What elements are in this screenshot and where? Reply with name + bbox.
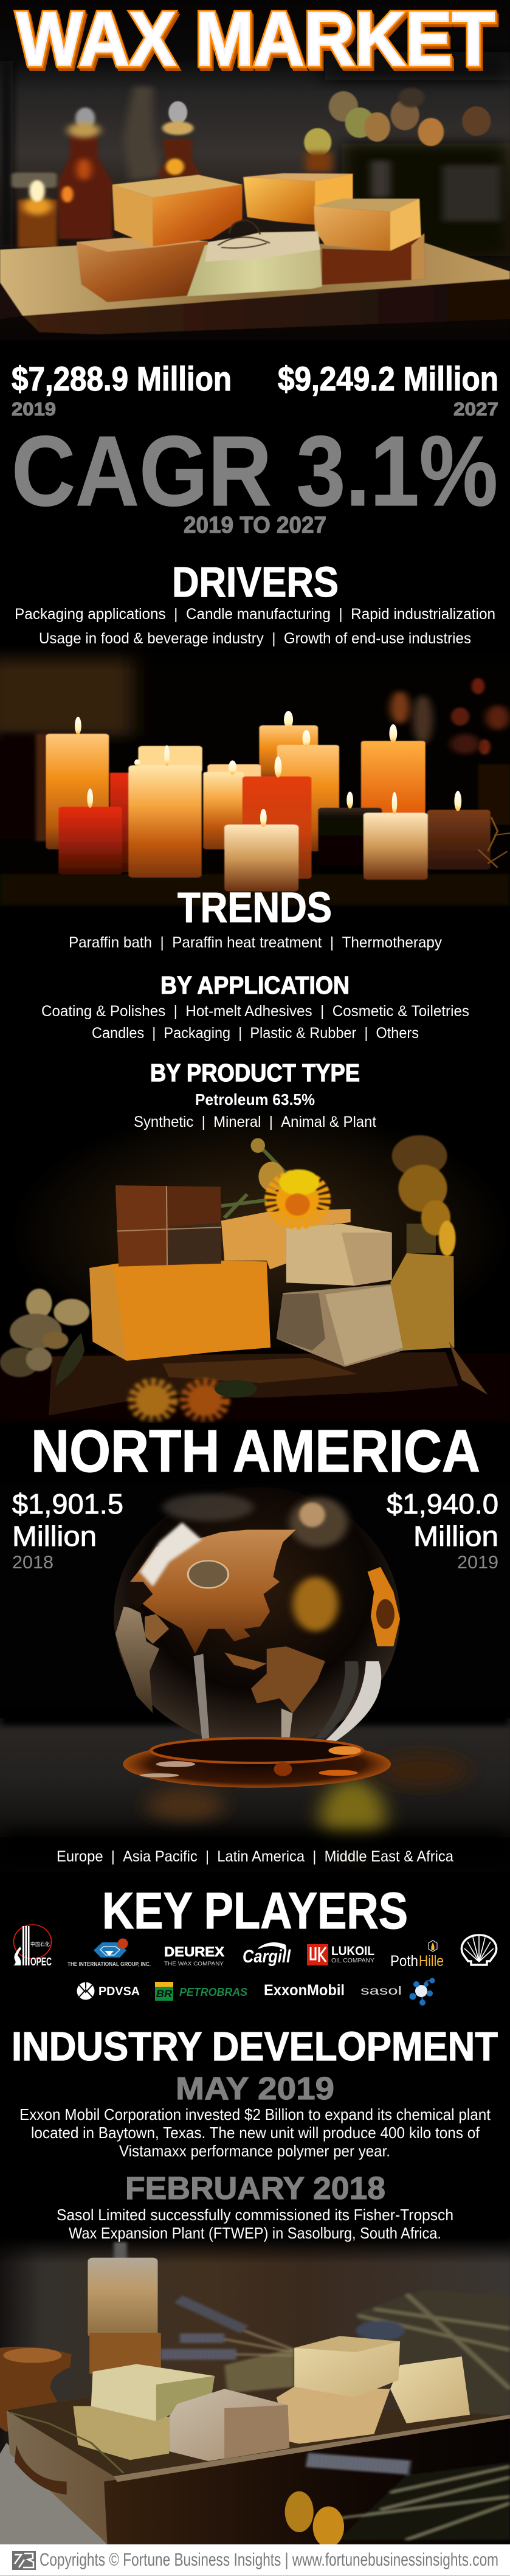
footer bar bbox=[0, 2544, 510, 2576]
trends list: Paraffin bath | Paraffin heat treatment | Thermotherapy bbox=[69, 934, 442, 951]
logo: Poth Hille: Hille bbox=[419, 1953, 444, 1970]
logo: Poth Hille bbox=[390, 1941, 444, 1970]
logo: Lukoil bbox=[307, 1944, 374, 1965]
photo: soap bars in wooden tray with lavender bbox=[0, 2238, 510, 2547]
logo: ExxonMobil: ExxonMobil bbox=[264, 1982, 345, 1999]
heading: by application: BY APPLICATION bbox=[160, 971, 350, 999]
North America value 2019: $1,940.0 bbox=[387, 1488, 498, 1520]
logo: Deurex: DEUREX bbox=[164, 1944, 224, 1959]
paragraph: Exxon Mobil: Exxon Mobil Corporation invested $2 Billion to expand its chemical plant bbox=[19, 2105, 491, 2124]
logo: Sinopec bbox=[13, 1925, 52, 1968]
logo: Petrobras bbox=[155, 1982, 247, 2001]
market value 2019: 2019 bbox=[12, 398, 56, 420]
paragraph: Exxon Mobil bbox=[19, 2105, 491, 2160]
heading: by product type: BY PRODUCT TYPE bbox=[150, 1059, 360, 1087]
logo: Petrobras: BR bbox=[156, 1988, 173, 2000]
heading: trends: TRENDS bbox=[177, 884, 332, 931]
logo: Cargill: Cargill bbox=[243, 1947, 291, 1967]
leading product share: Petroleum 63.5% bbox=[195, 1090, 315, 1109]
paragraph: Exxon Mobil: located in Baytown, Texas. The new unit will produce 400 kilo tons of bbox=[31, 2124, 480, 2142]
market value 2027 bbox=[278, 359, 498, 420]
paragraph: Sasol: Sasol Limited successfully commissioned its Fisher-Tropsch bbox=[57, 2206, 453, 2224]
paragraph: Sasol bbox=[57, 2206, 453, 2242]
logo: PDVSA bbox=[77, 1981, 140, 2000]
logo: Lukoil: LUKOIL bbox=[331, 1944, 374, 1958]
logo: Shell bbox=[461, 1935, 497, 1965]
drivers list: Packaging applications | Candle manufacturing | Rapid industrialization bbox=[15, 606, 495, 623]
other regions list: Europe | Asia Pacific | Latin America | Middle East & Africa bbox=[57, 1848, 453, 1865]
date: May 2019: MAY 2019 bbox=[176, 2071, 334, 2107]
CAGR period: 2019 TO 2027 bbox=[184, 513, 326, 538]
market value 2019: $7,288.9 Million bbox=[12, 359, 232, 398]
application list: Coating & Polishes | Hot-melt Adhesives | Cosmetic & Toiletries bbox=[41, 1003, 469, 1020]
date: February 2018: FEBRUARY 2018 bbox=[125, 2171, 385, 2206]
logo: The International Group bbox=[67, 1939, 151, 1968]
logo: Poth Hille: Poth bbox=[390, 1953, 418, 1970]
North America value 2018: 2018 bbox=[12, 1553, 53, 1573]
paragraph: Exxon Mobil: Vistamaxx performance polymer per year. bbox=[119, 2142, 390, 2160]
photo: wax blocks with flowers on log bbox=[0, 1109, 510, 1439]
logo row: key players bbox=[13, 1925, 497, 2006]
logo: Sinopec: 中国石化 bbox=[30, 1941, 50, 1947]
photo: wax globe on amber base bbox=[0, 1487, 510, 1862]
logo: PDVSA: PDVSA bbox=[98, 1985, 140, 1998]
logo: Sasol: sasol bbox=[360, 1985, 402, 1998]
footer logo bbox=[12, 2551, 36, 2570]
North America value 2018 bbox=[12, 1488, 123, 1573]
logo: Lukoil: OIL COMPANY bbox=[331, 1958, 374, 1964]
North America value 2019: 2019 bbox=[457, 1553, 498, 1573]
photo: burning candles bbox=[0, 651, 510, 906]
drivers list bbox=[15, 606, 495, 647]
heading: drivers: DRIVERS bbox=[172, 558, 339, 606]
logo: The International Group: THE INTERNATIONAL GROUP, INC. bbox=[67, 1961, 151, 1968]
application list: Candles | Packaging | Plastic & Rubber | Others bbox=[92, 1025, 419, 1042]
logo: Deurex: THE WAX COMPANY bbox=[164, 1961, 224, 1967]
market value 2019 bbox=[12, 359, 232, 420]
logo: Petrobras: PETROBRAS bbox=[179, 1986, 247, 1998]
North America value 2018: Million bbox=[12, 1520, 97, 1552]
market value 2027: 2027 bbox=[453, 398, 498, 420]
paragraph: Sasol: Wax Expansion Plant (FTWEP) in Sasolburg, South Africa. bbox=[69, 2224, 441, 2242]
North America value 2018: $1,901.5 bbox=[12, 1488, 123, 1520]
logo: Sasol bbox=[360, 1978, 435, 2006]
photo: wax blocks on tray with bottles and candle bbox=[0, 35, 510, 336]
heading: key players: KEY PLAYERS bbox=[102, 1882, 408, 1939]
logo: Deurex bbox=[164, 1944, 224, 1967]
North America value 2019: Million bbox=[413, 1520, 498, 1552]
application list bbox=[41, 1003, 469, 1042]
drivers list: Usage in food & beverage industry | Growth of end-use industries bbox=[39, 630, 471, 647]
product type list: Synthetic | Mineral | Animal & Plant bbox=[134, 1113, 376, 1130]
North America value 2019 bbox=[387, 1488, 498, 1573]
logo: Sinopec: OPEC bbox=[30, 1956, 52, 1968]
